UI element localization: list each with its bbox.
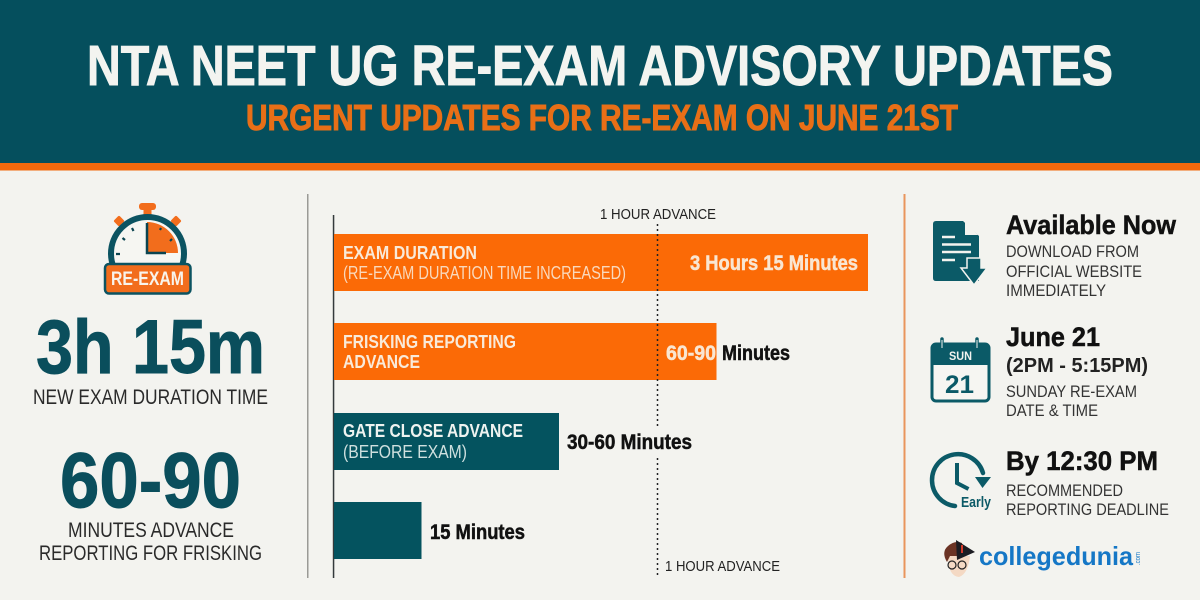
bar: gate close advance: 30-60 Minutes xyxy=(567,431,692,454)
panel: right updates xyxy=(932,210,1177,577)
text: by 12:30 pm xyxy=(1006,446,1169,519)
icon: re-exam stopwatch xyxy=(105,203,190,294)
logo: collegedunia: collegedunia xyxy=(979,541,1134,571)
text: by 12:30 pm: REPORTING DEADLINE xyxy=(1006,500,1169,519)
icon: early clock: Early xyxy=(961,494,992,511)
icon: document download xyxy=(933,221,987,285)
text: june 21: (2PM - 5:15PM) xyxy=(1006,355,1148,377)
stat: reporting minutes: 60-90 xyxy=(60,436,241,524)
stat caption: minutes advance xyxy=(39,519,262,565)
stat: exam duration: 3h 15m xyxy=(36,305,265,390)
stat caption: minutes advance: MINUTES ADVANCE xyxy=(68,519,234,542)
bar: gate close advance: GATE CLOSE ADVANCE xyxy=(343,421,523,441)
icon: calendar: 21 xyxy=(945,371,974,399)
text: june 21: June 21 xyxy=(1006,322,1100,352)
text: june 21: DATE & TIME xyxy=(1006,401,1098,420)
bar: gate close advance: (BEFORE EXAM) xyxy=(343,442,467,462)
bar: frisking reporting advance: ADVANCE xyxy=(343,352,420,372)
text: available now: Available Now xyxy=(1006,210,1177,240)
bar: frisking reporting advance: FRISKING REPORTING xyxy=(343,332,516,352)
bar: frisking reporting advance: Minutes xyxy=(722,342,790,365)
text: by 12:30 pm: RECOMMENDED xyxy=(1006,481,1123,500)
text: june 21 xyxy=(1006,322,1148,420)
reference line: one hour advance: 1 HOUR ADVANCE xyxy=(665,558,780,575)
reference line: one hour advance xyxy=(600,206,780,575)
subtitle: URGENT UPDATES FOR RE-EXAM ON JUNE 21ST xyxy=(246,97,958,138)
bar: gate close advance xyxy=(334,413,692,470)
bar: frisking reporting advance xyxy=(334,323,790,380)
icon: re-exam stopwatch: RE-EXAM xyxy=(111,269,184,290)
bar: exam duration: 3 Hours 15 Minutes xyxy=(690,252,858,275)
bar: exam duration xyxy=(334,234,868,291)
text: june 21: SUNDAY RE-EXAM xyxy=(1006,382,1137,401)
logo: collegedunia: .com xyxy=(1135,552,1142,565)
text: available now: DOWNLOAD FROM xyxy=(1006,242,1139,261)
bar: fifteen minutes: 15 Minutes xyxy=(430,521,525,544)
text: available now: IMMEDIATELY xyxy=(1006,281,1106,300)
panel: header banner xyxy=(0,0,1200,170)
icon: calendar: SUN xyxy=(949,349,972,363)
stat caption: new exam duration: NEW EXAM DURATION TIME xyxy=(33,386,268,409)
icon: graduate mascot xyxy=(944,540,975,577)
reference line: one hour advance: 1 HOUR ADVANCE xyxy=(600,206,716,223)
bar: frisking reporting advance: 60-90 xyxy=(666,342,716,365)
text: available now: OFFICIAL WEBSITE xyxy=(1006,262,1142,281)
bar: fifteen minutes xyxy=(334,502,525,559)
icon: calendar xyxy=(932,339,989,401)
panel: left key figures xyxy=(33,203,268,565)
icon: early clock xyxy=(932,454,992,511)
bar: exam duration: (RE-EXAM DURATION TIME INCREASED) xyxy=(343,263,626,283)
bar: exam duration: EXAM DURATION xyxy=(343,243,477,263)
panel: bar chart xyxy=(333,206,868,578)
text: available now xyxy=(1006,210,1177,300)
logo: collegedunia xyxy=(944,540,1142,577)
stat caption: minutes advance: REPORTING FOR FRISKING xyxy=(39,542,262,565)
text: by 12:30 pm: By 12:30 PM xyxy=(1006,446,1158,476)
